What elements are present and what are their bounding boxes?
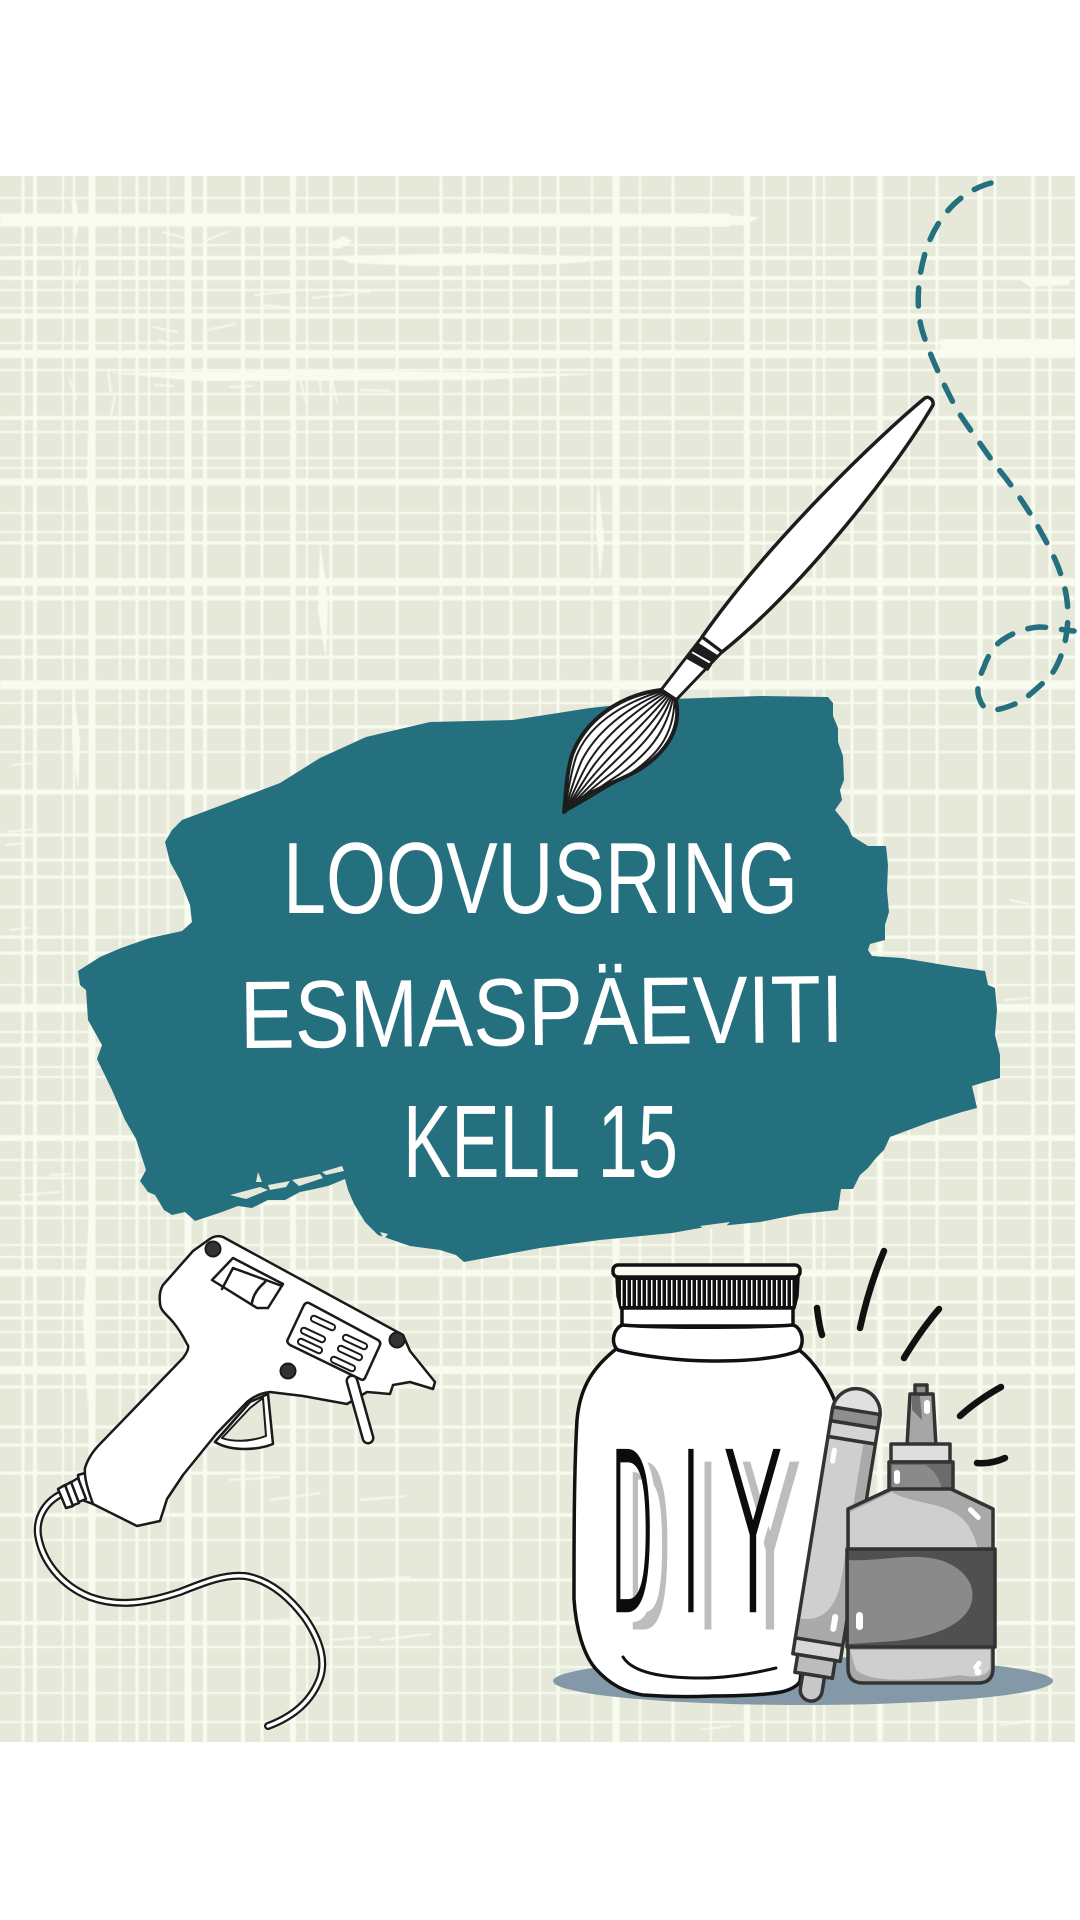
glue gun cord: [38, 1492, 322, 1726]
sparkle lines around bottle: [817, 1251, 1005, 1463]
title line 2: ESMASPÄEVITI: [239, 956, 844, 1069]
jar collar: [613, 1325, 802, 1361]
glue gun body: [85, 1236, 435, 1526]
glue gun vent plate: [287, 1303, 380, 1380]
DIY black letters: D: [610, 1409, 654, 1662]
jar lid: [617, 1277, 798, 1308]
table shadow ellipse: [553, 1657, 1053, 1705]
marker cap dome: [832, 1385, 884, 1422]
bottle body: [848, 1489, 993, 1683]
marker pen: [786, 1385, 884, 1705]
marker barrel: [795, 1436, 875, 1648]
brush handle: [702, 397, 933, 652]
title line 1: LOOVUSRING: [283, 823, 798, 935]
jar neck: [622, 1306, 793, 1326]
brush ferrule: [661, 637, 722, 700]
title line 3: KELL 15: [403, 1084, 678, 1199]
jar bottom glass line: [623, 1657, 776, 1678]
glue gun trigger: [215, 1394, 273, 1449]
glue gun stand: [352, 1381, 368, 1438]
jar lettering DIY: Y: [725, 1409, 781, 1662]
marker collar: [793, 1638, 843, 1661]
marker tip: [795, 1654, 835, 1678]
thread: dashed teal line: [918, 183, 1074, 710]
bottle cap: [891, 1444, 950, 1462]
bottle label: [847, 1549, 995, 1647]
glue gun switch: [212, 1258, 283, 1308]
bottle nozzle: [907, 1394, 936, 1446]
scratches on lower left of paint stroke: [230, 1166, 730, 1239]
poster: Y: [742, 1424, 798, 1677]
brush head with bristles: [564, 690, 677, 812]
paint brush: [564, 397, 933, 812]
glue gun strain relief: [58, 1473, 93, 1508]
teal paint brush stroke: [78, 696, 1000, 1262]
DIY shadow: D: [627, 1424, 671, 1677]
marker bands: [831, 1407, 880, 1428]
glue gun screws: [206, 1242, 404, 1378]
glue bottle: [847, 1385, 995, 1683]
DIY black letters: I: [680, 1409, 702, 1662]
title text: [239, 823, 844, 1199]
DIY shadow: I: [697, 1424, 719, 1677]
glue gun: [38, 1236, 435, 1726]
jar lettering DIY: Y: [731, 1415, 787, 1668]
bottle highlights: [856, 1506, 983, 1676]
mason jar: [574, 1265, 838, 1697]
DIY white halo: I: [686, 1415, 708, 1668]
jar lettering DIY: [610, 1409, 798, 1677]
jar body: [574, 1349, 838, 1697]
DIY white halo: D: [616, 1415, 660, 1668]
